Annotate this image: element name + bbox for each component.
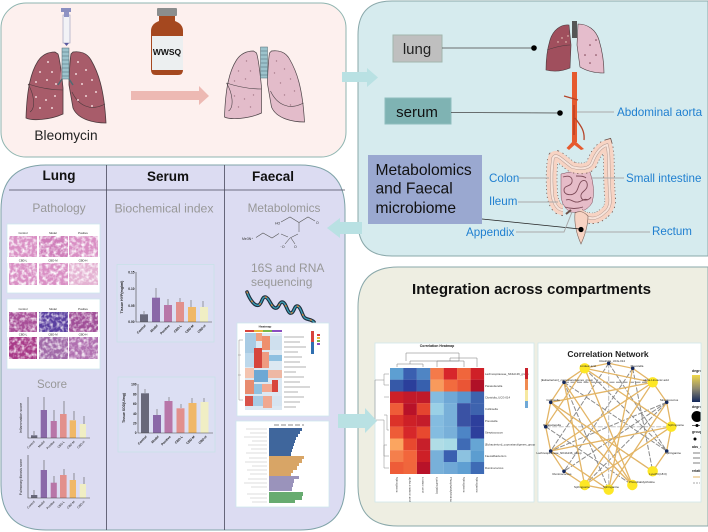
icon: syringe [61, 8, 71, 46]
icon: molecule structure: ⁻O [280, 245, 285, 249]
chart: tissue SOD: CBD-L [174, 435, 184, 445]
panel: sampling sites [358, 1, 708, 256]
chart: pulmonary fibrosis score: CBD-H [76, 500, 86, 509]
chart: inflammation score: CBD-L [57, 440, 66, 449]
network: node labels: Prevotella [631, 364, 644, 368]
image: Masson staining panel: CBD-H [79, 332, 87, 336]
chart: tissue HYP: 0.15 [128, 270, 135, 274]
box: serum: serum [396, 104, 438, 121]
chart: tissue HYP: Control [136, 324, 147, 335]
network: grey dashed edges [546, 363, 671, 490]
network: node labels: Linoleic acid [580, 364, 596, 368]
chart: correlation heatmap: Sphinganine [475, 477, 479, 493]
icon: recovered lungs [224, 47, 304, 122]
chart: correlation heatmap: Lachnospiraceae_NK4A136_group [485, 372, 529, 376]
chart: correlation heatmap [375, 343, 536, 502]
leader: abdominal aorta [577, 111, 614, 113]
box: metabolomics and faecal microbiome: microbiome [376, 200, 456, 217]
heading: Lung: Lung [42, 168, 76, 183]
leaders: anatomy labels [516, 178, 650, 232]
subheading: Metabolomics: Metabolomics [248, 201, 320, 215]
icon: molecule structure: Me3N⁺ [242, 237, 253, 241]
chart: correlation heatmap: Ruminococcus [485, 466, 504, 470]
icon: intestines [552, 145, 610, 244]
network: node labels: Ruminococcus [553, 472, 572, 476]
chart: tissue HYP: Tissue HYP(mg/ml) [120, 280, 124, 313]
chart: taxa heatmap [237, 323, 329, 416]
image: Masson staining panel: CBD-L [19, 332, 28, 336]
box: serum [385, 98, 451, 124]
heading: Correlation Network: Correlation Network [567, 349, 649, 359]
image: HE staining panel: Model [49, 231, 57, 235]
network: node labels: Sphinganine [603, 485, 619, 489]
network: nodes [544, 362, 676, 495]
chart: correlation heatmap: alpha-Linolenic acid [408, 477, 412, 502]
label: Rectum: Rectum [652, 225, 692, 238]
legend: network: degree [692, 369, 704, 373]
box: metabolomics and faecal microbiome [368, 155, 482, 224]
network: gold edges [546, 363, 671, 490]
chart: tissue HYP [117, 264, 214, 342]
chart: tissue SOD: Control [137, 435, 148, 446]
network: node labels: Sphingosine [668, 423, 684, 427]
icon: molecule structure: O [294, 245, 297, 249]
subheading: Pathology: Pathology [32, 201, 86, 215]
chart: tissue HYP: CBD-M [184, 324, 195, 334]
arrow: treatment [131, 86, 209, 105]
icon: molecule structure [242, 217, 319, 249]
panel: lung serum faecal analyses [1, 165, 345, 530]
icon: DNA helix [247, 292, 314, 322]
legend: network: relation [692, 469, 705, 473]
legend: network: group [692, 430, 702, 434]
chart: correlation heatmap: Sphingosine [462, 477, 466, 493]
legend: network: degree [692, 405, 704, 409]
arrow: sampling to analyses [327, 218, 362, 238]
label: Bleomycin: Bleomycin [34, 128, 98, 143]
chart: tissue HYP: 0.10 [128, 287, 135, 291]
chart: tissue HYP: Model [149, 324, 159, 333]
chart: tissue SOD: 40 [133, 412, 137, 416]
icon: WWSQ vial [151, 8, 183, 75]
chart: inflammation score: Control [26, 440, 36, 450]
chart: tissue SOD: 20 [133, 422, 137, 426]
chart: correlation heatmap: LysoPC(18:0) [435, 477, 439, 494]
leader: lung [442, 45, 537, 51]
chart: enrichment bars [236, 421, 329, 507]
label: Colon: Colon [489, 172, 519, 185]
chart: correlation heatmap: Prevotella [485, 419, 498, 423]
chart: tissue HYP: CBD-L [173, 324, 183, 334]
chart: tissue SOD: 60 [133, 402, 137, 406]
chart: tissue HYP: 0.05 [128, 304, 135, 308]
icon: molecule structure: O [316, 221, 319, 225]
image: HE staining panel: CBD-L [19, 258, 28, 262]
label: Ileum: Ileum [489, 195, 517, 208]
chart: tissue SOD: Positive [160, 435, 172, 446]
network: node labels: Lachnospiraceae_NK4A136_group [536, 451, 582, 455]
chart: correlation heatmap: [Eubacterium]_coprostanoligenes_group [485, 442, 536, 446]
icon: diseased lungs [26, 48, 106, 123]
subheading: 16S and RNA sequencing: sequencing [251, 275, 312, 289]
network: node labels: LysoPC(18:0) [649, 472, 667, 476]
box: metabolomics and faecal microbiome: Metabolomics [376, 162, 472, 179]
image: Masson staining panel [7, 299, 100, 369]
chart: tissue SOD: Tissue SOD(U/mg) [122, 393, 126, 423]
chart: correlation heatmap: Collinsella [485, 407, 498, 411]
label: Appendix: Appendix [466, 226, 515, 239]
network: node labels [536, 359, 684, 489]
chart: tissue SOD: Model [150, 435, 160, 444]
icon: half diseased lungs [546, 21, 604, 73]
network: node labels: [Eubacterium]_coprostanoligenes_group [541, 378, 593, 382]
chart: pulmonary fibrosis score: Positive [45, 500, 56, 510]
heading: Serum: Serum [147, 169, 189, 184]
chart: inflammation score: Inflammation score [19, 403, 23, 433]
image: Masson staining panel: Positive [78, 307, 88, 311]
legend: network [692, 370, 700, 484]
subheading: Score: Score [37, 379, 67, 391]
chart: inflammation score: CBD-M [66, 440, 76, 450]
chart: pulmonary fibrosis score: Pulmonary fibrosis score [19, 459, 23, 495]
image: Masson staining panel: CBD-M [48, 332, 58, 336]
chart: inflammation score: Model [37, 440, 46, 448]
image: Masson staining panel: Model [49, 307, 57, 311]
legend: network: abs_cor [692, 445, 706, 449]
label: Small intestine: Small intestine [626, 172, 701, 185]
chart: tissue SOD [118, 377, 215, 452]
box: metabolomics and faecal microbiome: and Faecal [376, 180, 453, 198]
image: HE staining panel: Positive [78, 231, 88, 235]
network: node labels: alpha-Linolenic acid [643, 378, 669, 382]
chart: inflammation score [19, 397, 90, 450]
leader: faecal sample site [482, 219, 584, 232]
image: Masson staining panel: Control [18, 307, 28, 311]
network: node labels: Sphingosine [574, 485, 590, 489]
icon: WWSQ vial: WWSQ [153, 47, 182, 57]
box: lung [393, 35, 442, 62]
chart: tissue SOD: 0 [135, 431, 137, 435]
image: HE staining panel [7, 224, 100, 293]
panel: integration across compartments [358, 267, 708, 526]
chart: correlation heatmap: Streptococcus [485, 430, 503, 434]
heading: Faecal: Faecal [252, 169, 294, 184]
image: HE staining panel: CBD-M [48, 258, 58, 262]
panel: bleomycin model and treatment [1, 3, 346, 157]
chart: correlation heatmap: Linoleic acid [421, 477, 425, 493]
leader: serum [451, 110, 563, 116]
subheading: 16S and RNA sequencing: 16S and RNA [251, 261, 324, 275]
chart: tissue HYP: Positive [159, 324, 171, 335]
subheading: Biochemical index: Biochemical index [114, 202, 214, 216]
chart: inflammation score: Positive [45, 440, 56, 450]
chart: tissue HYP: CBD-H [197, 323, 207, 334]
chart: tissue SOD: CBD-H [198, 434, 208, 445]
chart: pulmonary fibrosis score: Model [37, 500, 46, 508]
chart: pulmonary fibrosis score: CBD-L [57, 500, 66, 509]
chart: correlation heatmap: Phosphatidylcholine [449, 477, 453, 502]
chart: correlation network [536, 343, 706, 502]
chart: correlation heatmap: Sphingosine [395, 477, 399, 493]
network: node labels: Clostridia_UCG-014 [599, 359, 625, 363]
chart: correlation heatmap: Parasutterella [485, 384, 503, 388]
label: Abdominal aorta: Abdominal aorta [617, 106, 703, 119]
chart: tissue SOD: CBD-M [185, 435, 196, 445]
chart: inflammation score: CBD-H [76, 440, 86, 449]
chart: correlation heatmap: Correlation Heatmap [420, 344, 454, 348]
network: node labels: Parasutterella [543, 423, 561, 427]
heading: Integration across compartments: Integration across compartments [412, 281, 651, 298]
icon: molecule structure: HO [275, 222, 281, 226]
chart: correlation heatmap: Clostridia_UCG-014 [485, 396, 510, 400]
box: lung: lung [403, 41, 431, 58]
chart: correlation heatmap: Faecalibacterium [485, 454, 507, 458]
arrow: analyses to integration [338, 408, 377, 433]
arrow: model to sampling [342, 68, 378, 87]
network: node labels: Phosphatidylcholine [629, 480, 655, 484]
icon: abdominal aorta [564, 72, 584, 150]
network: node labels: Streptococcus [660, 398, 679, 402]
chart: tissue SOD: 80 [133, 392, 137, 396]
chart: pulmonary fibrosis score: CBD-M [66, 500, 76, 510]
chart: pulmonary fibrosis score: Control [26, 500, 36, 510]
network: node labels: Sphinganine [665, 451, 681, 455]
chart: taxa heatmap: Heatmap [259, 324, 272, 328]
image: HE staining panel: CBD-H [79, 258, 87, 262]
chart: tissue SOD: 100 [131, 382, 137, 386]
image: HE staining panel: Control [18, 231, 28, 235]
network: node labels: Collinsella [546, 398, 560, 402]
chart: pulmonary fibrosis score [19, 455, 90, 510]
chart: tissue HYP: 0.00 [128, 320, 135, 324]
